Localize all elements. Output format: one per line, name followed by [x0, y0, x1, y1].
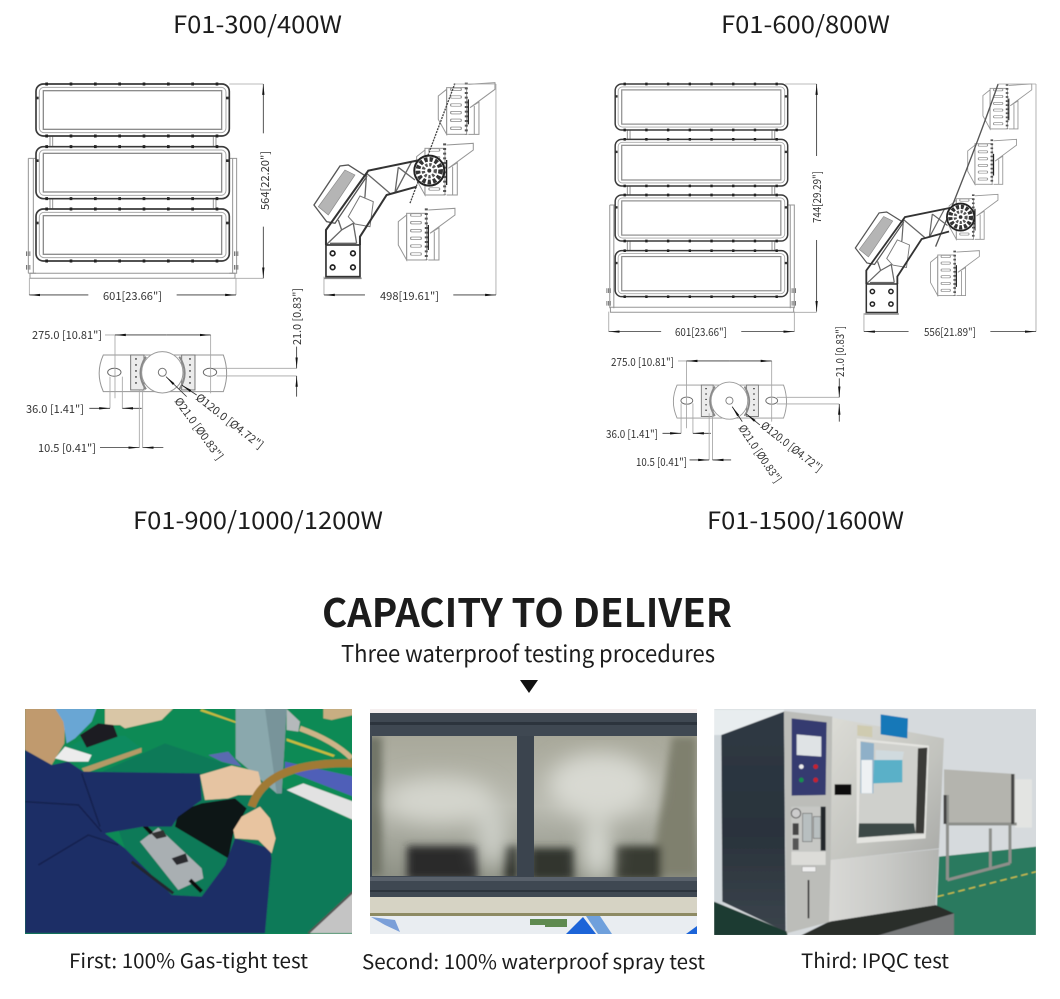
photo: waterproof spray test chamber — [366, 709, 697, 934]
dimension labels: right drawings: Ø120.0 [Ø4.72"] — [758, 418, 826, 476]
background: wall, floor and rear tank — [714, 708, 1037, 936]
dimension labels: right drawings: 21.0 [0.83"] — [832, 326, 848, 377]
dimension labels: right drawings: 36.0 [1.41"] — [606, 426, 658, 442]
dimension labels: left drawings: 498[19.61"] — [380, 288, 439, 304]
dimension labels: left drawings: 21.0 [0.83"] — [289, 288, 305, 345]
dimension labels: left drawings: Ø21.0 [Ø0.83"] — [171, 394, 227, 463]
dimension labels: right drawings: 556[21.89"] — [924, 324, 976, 340]
dimension labels: left drawings: 10.5 [0.41"] — [38, 440, 96, 456]
dimension lines: left drawings — [29, 84, 496, 448]
caption: third test: Third: IPQC test — [801, 945, 949, 974]
caption: second test: Second: 100% waterproof spray test — [362, 946, 705, 975]
dimension lines: right drawings — [609, 84, 1036, 460]
dimension labels: left drawings: Ø120.0 [Ø4.72"] — [193, 390, 267, 453]
dimension labels: right drawings: 744[29.29"] — [809, 171, 825, 223]
model heading: F01-300/400W: F01-300/400W — [173, 5, 342, 40]
model heading: F01-600/800W: F01-600/800W — [721, 5, 890, 40]
technical drawing: mounting plate, left — [99, 352, 227, 393]
photo: IPQC test machine — [714, 708, 1037, 936]
dimension labels: left drawings: 564[22.20"] — [257, 151, 273, 210]
dimension labels: right drawings — [606, 171, 976, 486]
caption: first test: First: 100% Gas-tight test — [69, 945, 308, 974]
dimension labels: right drawings: Ø21.0 [Ø0.83"] — [735, 421, 785, 486]
test chamber front — [714, 710, 954, 936]
technical drawing: three-module side view — [314, 83, 495, 278]
dimension labels: right drawings: 601[23.66"] — [675, 324, 727, 340]
technical drawing: mounting plate, right — [673, 382, 786, 419]
dimension labels: left drawings: 36.0 [1.41"] — [26, 401, 84, 417]
dimension labels: left drawings: 601[23.66"] — [103, 288, 162, 304]
dimension labels: left drawings — [26, 151, 439, 463]
dimension labels: left drawings: 275.0 [10.81"] — [32, 327, 102, 343]
photo: worker doing gas-tight test — [22, 705, 358, 938]
icon: downward triangle — [520, 680, 538, 693]
model heading: F01-900/1000/1200W: F01-900/1000/1200W — [133, 501, 383, 536]
technical drawing: four-module front view — [606, 84, 796, 312]
section subtitle: Three waterproof testing procedures — [341, 635, 715, 669]
dimension labels: right drawings: 275.0 [10.81"] — [611, 354, 674, 370]
dimension labels: right drawings: 10.5 [0.41"] — [636, 454, 687, 470]
technical drawing: three-module front view — [26, 84, 239, 278]
model heading: F01-1500/1600W: F01-1500/1600W — [707, 501, 904, 536]
section title: CAPACITY TO DELIVER — [322, 583, 732, 639]
technical drawing: four-module side view — [855, 84, 1032, 314]
